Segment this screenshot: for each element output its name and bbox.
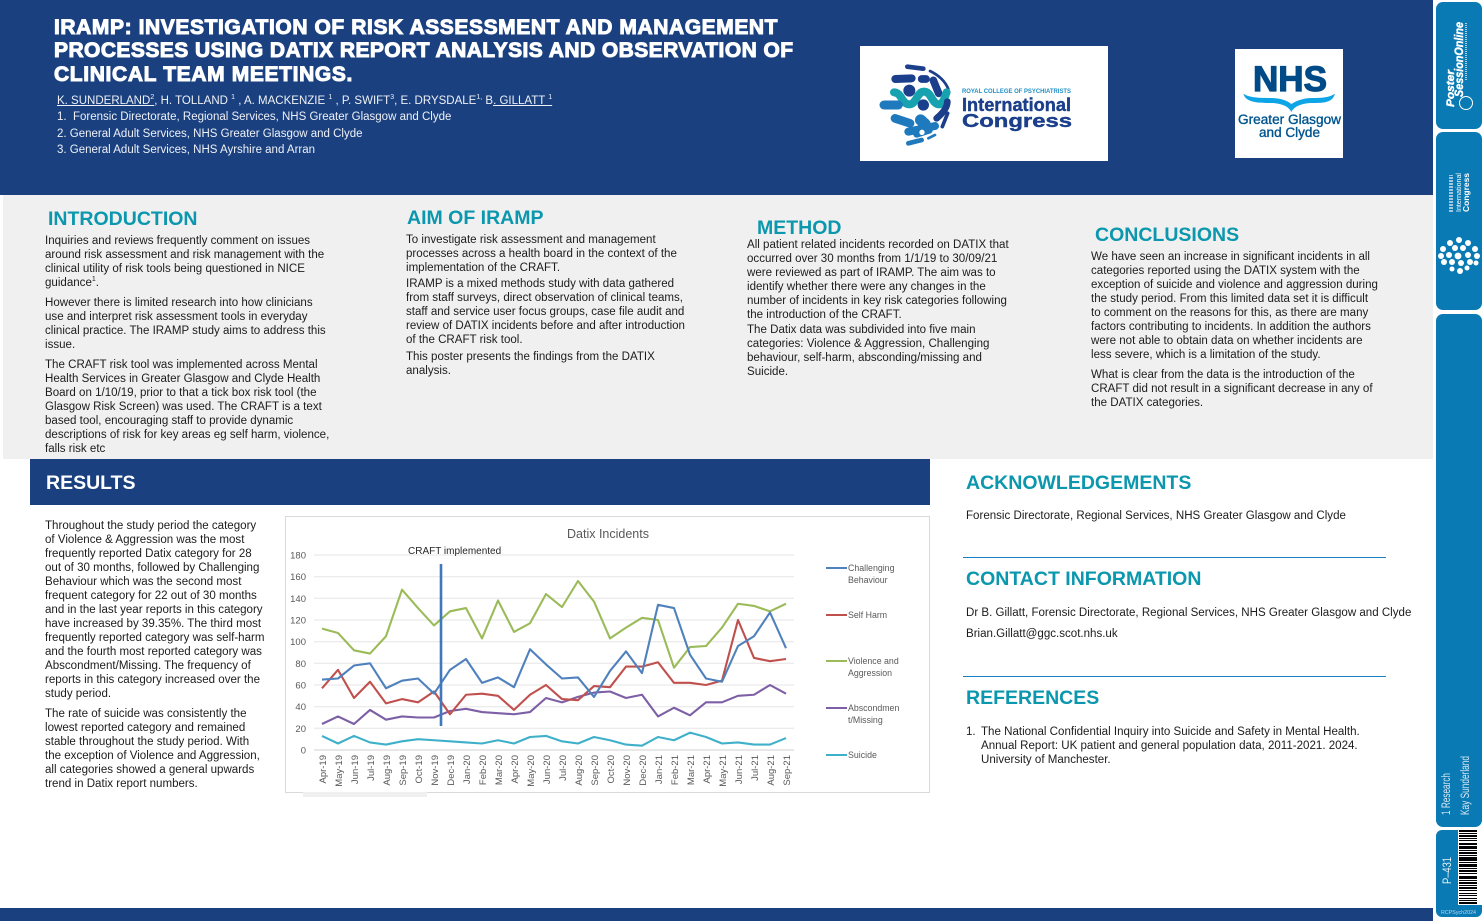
logo: Royal College of Psychiatrists International Congress: ROYAL COLLEGE OF PSYCHIATRISTS xyxy=(962,88,1072,95)
text: conclusions paragraphs: the study period. From this limited data set it is difficult xyxy=(1091,293,1368,305)
text: results paragraphs: reports in this category increased over the xyxy=(45,674,260,686)
panel: introduction xyxy=(45,208,329,455)
text: introduction paragraphs: Board on 1/10/19, prior to that a tick box risk tool (the xyxy=(45,387,316,399)
logo: NHS Greater Glasgow and Clyde xyxy=(1235,49,1343,158)
y axis labels: 60 xyxy=(295,680,306,692)
panel: acknowledgements xyxy=(966,472,1346,522)
x axis labels: Sep-21 xyxy=(782,755,793,786)
panel: contact information xyxy=(966,568,1411,640)
text: acknowledgements: Forensic Directorate, Regional Services, NHS Greater Glasgow and Clyde xyxy=(966,510,1346,522)
text: conclusions paragraphs: factors contributing to incidents. In addition the authors xyxy=(1091,321,1371,333)
grey content panel xyxy=(3,195,1433,459)
text: introduction paragraphs: Health Services in Greater Glasgow and Clyde Health xyxy=(45,373,320,385)
heading: aim: AIM OF IRAMP xyxy=(407,207,544,229)
authors: K. SUNDERLAND2, H. TOLLAND 1 , A. MACKENZIE 1 , P. SWIFT3, E. DRYSDALE1, B. GILLATT 1 xyxy=(57,94,552,107)
y axis labels: 100 xyxy=(290,637,306,648)
text: introduction paragraphs: use and interpret risk assessment tools in everyday xyxy=(45,311,308,323)
text: method paragraphs: behaviour, self-harm, absconding/missing and xyxy=(747,352,982,364)
y axis labels: 40 xyxy=(295,702,306,713)
text: aim paragraphs: To investigate risk assessment and management xyxy=(406,234,656,246)
y axis labels: 0 xyxy=(301,746,306,756)
x axis labels: Apr-20 xyxy=(510,755,521,784)
text: conclusions paragraphs: We have seen an increase in significant incidents in all xyxy=(1091,251,1370,263)
text: introduction paragraphs: issue. The CRAFT risk tool was implemented across Mental xyxy=(45,339,318,371)
text: introduction paragraphs: based tool, encouraging staff to provide dynamic xyxy=(45,415,293,427)
x axis labels: Oct-20 xyxy=(606,755,617,784)
tab: presenter xyxy=(1436,314,1482,827)
y axis labels: 20 xyxy=(295,724,306,735)
text: aim paragraphs: analysis. xyxy=(406,365,451,377)
text: introduction paragraphs: guidance1. However there is limited research into how clinicians xyxy=(45,276,313,309)
heading: results: RESULTS xyxy=(46,472,136,494)
text: conclusions paragraphs xyxy=(1091,251,1378,409)
logo: Royal College of Psychiatrists International Congress: Congress xyxy=(962,111,1072,131)
text: method paragraphs: number of incidents in key risk categories following xyxy=(747,295,1007,307)
y axis labels: 160 xyxy=(290,572,306,583)
legend xyxy=(826,563,899,760)
text: introduction paragraphs: falls risk etc xyxy=(45,443,105,455)
text: method paragraphs xyxy=(747,239,1009,378)
results heading bar xyxy=(30,459,930,505)
data lines xyxy=(322,581,786,746)
text: results paragraphs: out of 30 months, followed by Challenging xyxy=(45,562,259,574)
logo: Royal College of Psychiatrists International Congress xyxy=(860,46,1108,161)
text: introduction paragraphs: around risk assessment and risk management with the xyxy=(45,249,324,261)
x axis labels: Aug-20 xyxy=(574,755,585,786)
text: aim paragraphs: from staff surveys, direct observation of clinical teams, xyxy=(406,292,683,304)
text: results paragraphs: have increased by 39.35%. The third most xyxy=(45,618,261,630)
text: results paragraphs: frequently reported Datix category for 28 xyxy=(45,548,252,560)
panel: conclusions xyxy=(1091,224,1378,409)
heading: contact: CONTACT INFORMATION xyxy=(966,568,1201,590)
text: introduction paragraphs xyxy=(45,235,329,455)
text: aim paragraphs: processes across a health board in the context of the xyxy=(406,248,677,260)
text: results paragraphs: frequently reported category was self-harm xyxy=(45,632,264,644)
tab: poster number and barcode xyxy=(1436,830,1482,917)
y axis labels: 120 xyxy=(290,616,306,626)
panel: references xyxy=(966,687,1360,766)
line: abscondment xyxy=(322,685,786,724)
title: PROCESSES USING DATIX REPORT ANALYSIS AND OBSERVATION OF xyxy=(54,39,794,62)
panel: references: The National Confidential Inquiry into Suicide and Safety in Mental Health. xyxy=(981,726,1360,738)
legend: Violence and xyxy=(848,656,899,666)
x axis labels: Feb-21 xyxy=(670,755,681,785)
text: introduction paragraphs: Glasgow Risk Screen) was used. The CRAFT is a text xyxy=(45,401,322,413)
panel: aim of IRAMP xyxy=(406,207,685,377)
title xyxy=(54,16,794,86)
x axis labels: Sep-19 xyxy=(398,755,409,786)
text: results paragraphs xyxy=(45,520,264,790)
line: suicide xyxy=(322,733,786,746)
x axis labels: Nov-19 xyxy=(430,755,441,786)
x axis labels xyxy=(318,755,793,787)
legend: Self Harm xyxy=(848,610,887,620)
footer band xyxy=(0,908,1433,921)
heading: method: METHOD xyxy=(757,217,842,239)
x axis labels: Apr-21 xyxy=(702,755,713,784)
text: conclusions paragraphs: were not able to obtain data on whether incidents are xyxy=(1091,335,1363,347)
chart title: Datix Incidents xyxy=(567,527,649,541)
text: method paragraphs: the introduction of the CRAFT. The Datix data was subdivided into five main xyxy=(747,309,976,336)
tab: International Congress: Congress xyxy=(1462,172,1471,212)
heading: conclusions: CONCLUSIONS xyxy=(1095,224,1239,246)
text: conclusions paragraphs: less severe, which is a limitation of the study. What is clear from the data is the introduction of the xyxy=(1091,349,1355,381)
text: aim paragraphs: review of DATIX incidents before and after introduction xyxy=(406,320,685,332)
logo: NHS Greater Glasgow and Clyde: NHS xyxy=(1253,60,1327,99)
x axis labels: Nov-20 xyxy=(622,755,633,786)
text: method paragraphs: Suicide. xyxy=(747,366,788,378)
logo: Royal College of Psychiatrists International Congress: International xyxy=(962,95,1071,115)
x axis labels: Dec-19 xyxy=(446,755,457,786)
x axis labels: Mar-20 xyxy=(494,755,505,785)
text: results paragraphs: Behaviour which was the second most xyxy=(45,576,241,588)
text: results paragraphs: of Violence & Aggression was the most xyxy=(45,534,244,546)
text: conclusions paragraphs: categories reported using the DATIX system with the xyxy=(1091,265,1360,277)
logo: NHS Greater Glasgow and Clyde: and Clyde xyxy=(1259,125,1320,140)
y axis labels: 140 xyxy=(290,594,306,605)
text: results paragraphs: Throughout the study period the category xyxy=(45,520,256,532)
x axis labels: Apr-19 xyxy=(318,755,329,784)
panel: method xyxy=(747,217,1009,378)
legend: Challenging xyxy=(848,563,895,573)
x axis labels: May-21 xyxy=(718,755,729,787)
line: self harm xyxy=(322,620,786,714)
x axis labels: May-20 xyxy=(526,755,537,787)
text: aim paragraphs xyxy=(406,234,685,377)
y axis labels: 80 xyxy=(295,659,306,670)
text: aim paragraphs: of the CRAFT risk tool. This poster presents the findings from the DATIX xyxy=(406,334,655,363)
text: conclusions paragraphs: CRAFT did not result in a significant decrease in any of xyxy=(1091,383,1373,395)
text: results paragraphs: Abscondment/Missing. The frequency of xyxy=(45,660,251,672)
text: results paragraphs: the exception of Violence and Aggression, xyxy=(45,750,260,762)
x axis labels: Aug-21 xyxy=(766,755,777,786)
text: aim paragraphs: staff and service user focus groups, case file audit and xyxy=(406,306,684,318)
affiliations: 1. Forensic Directorate, Regional Services, NHS Greater Glasgow and Clyde xyxy=(57,111,451,123)
tab: presenter: 1 Research xyxy=(1441,773,1453,815)
tab: poster number and barcode: RCPSych2024 xyxy=(1441,910,1476,916)
y axis labels xyxy=(290,550,306,756)
x axis labels: Jul-19 xyxy=(366,755,377,781)
panel: contact information: Brian.Gillatt@ggc.scot.nhs.uk xyxy=(966,628,1118,640)
panel: references: University of Manchester. xyxy=(981,754,1111,766)
text: results paragraphs: lowest reported category and remained xyxy=(45,722,245,734)
y axis labels: 180 xyxy=(290,550,306,562)
affiliations: 2. General Adult Services, NHS Greater Glasgow and Clyde xyxy=(57,128,363,140)
text: results paragraphs: trend in Datix report numbers. xyxy=(45,778,198,790)
text: introduction paragraphs: clinical practice. The IRAMP study aims to address this xyxy=(45,325,326,337)
text: conclusions paragraphs: exception of suicide and violence and aggression during xyxy=(1091,279,1378,291)
x axis labels: Oct-19 xyxy=(414,755,425,784)
x axis labels: Jan-21 xyxy=(654,755,665,784)
text: contact details: Dr B. Gillatt, Forensic Directorate, Regional Services, NHS Greater Glasgow and Clyde xyxy=(966,607,1411,619)
text: method paragraphs: occurred over 30 months from 1/1/19 to 30/09/21 xyxy=(747,253,997,265)
text: results paragraphs: and in the last year reports in this category xyxy=(45,604,263,616)
legend: Abscondmen xyxy=(848,703,899,713)
text: conclusions paragraphs: the DATIX categories. xyxy=(1091,397,1203,409)
x axis labels: Jan-20 xyxy=(462,755,473,784)
text: results paragraphs: stable throughout the study period. With xyxy=(45,736,249,748)
x axis labels: Mar-21 xyxy=(686,755,697,785)
line: violence and aggression xyxy=(322,581,786,668)
text: method paragraphs: were reviewed as part of IRAMP. The aim was to xyxy=(747,267,996,279)
text: results paragraphs: all categories showed a general upwards xyxy=(45,764,254,776)
text: introduction paragraphs: descriptions of risk for key areas eg self harm, violence, xyxy=(45,429,329,441)
x axis labels: May-19 xyxy=(334,755,345,787)
tab: presenter: Kay Sunderland xyxy=(1460,756,1472,815)
text: method paragraphs: All patient related incidents recorded on DATIX that xyxy=(747,239,1009,251)
text: introduction paragraphs: clinical utility of risk tools being questioned in NICE xyxy=(45,263,305,275)
x axis labels: Sep-20 xyxy=(590,755,601,786)
heading: acknowledgements: ACKNOWLEDGEMENTS xyxy=(966,472,1191,494)
title: CLINICAL TEAM MEETINGS. xyxy=(54,63,353,86)
legend: Behaviour xyxy=(848,575,888,585)
x axis labels: Jul-21 xyxy=(750,755,761,781)
x axis labels: Jul-20 xyxy=(558,755,569,781)
x axis labels: Jun-20 xyxy=(542,755,553,784)
tab: Poster Session Online: SessionOnline xyxy=(1452,22,1466,97)
tab: Poster Session Online xyxy=(1436,2,1482,129)
legend: Aggression xyxy=(848,668,892,678)
text: method paragraphs: identify whether there were any changes in the xyxy=(747,281,986,293)
heading: introduction: INTRODUCTION xyxy=(48,208,198,230)
marker: CRAFT implemented: CRAFT implemented xyxy=(408,546,501,557)
panel: references: Annual Report: UK patient and general population data, 2011-2021. 2024. xyxy=(981,740,1358,752)
tab: poster number and barcode: P–431 xyxy=(1440,857,1454,884)
x axis labels: Jun-19 xyxy=(350,755,361,784)
affiliations: 3. General Adult Services, NHS Ayrshire and Arran xyxy=(57,144,315,156)
side tabs xyxy=(1436,2,1482,917)
text: method paragraphs: categories: Violence & Aggression, Challenging xyxy=(747,338,989,350)
tab: International Congress: International xyxy=(1454,173,1463,212)
tab: Poster Session Online: Poster xyxy=(1445,69,1457,107)
tab: International Congress xyxy=(1436,132,1482,310)
text: results paragraphs: frequent category for 22 out of 30 months xyxy=(45,590,257,602)
chart: Datix incidents line chart xyxy=(285,516,930,797)
legend: t/Missing xyxy=(848,715,883,725)
logo: NHS Greater Glasgow and Clyde: Greater Glasgow xyxy=(1238,112,1341,127)
header band xyxy=(0,0,1433,195)
line: challenging behaviour xyxy=(322,605,786,697)
affiliations xyxy=(57,111,451,156)
text: reference list: 1. xyxy=(966,726,976,738)
text: conclusions paragraphs: to comment on the reasons for this, as there are many xyxy=(1091,307,1368,319)
text: results paragraphs: study period. The rate of suicide was consistently the xyxy=(45,688,247,720)
heading: references: REFERENCES xyxy=(966,687,1099,709)
x axis labels: Aug-19 xyxy=(382,755,393,786)
x axis labels: Feb-20 xyxy=(478,755,489,785)
text: results paragraphs: and the fourth most reported category was xyxy=(45,646,262,658)
text: aim paragraphs: implementation of the CRAFT. IRAMP is a mixed methods study with data gathered xyxy=(406,262,674,290)
x axis labels: Dec-20 xyxy=(638,755,649,786)
legend: Suicide xyxy=(848,750,877,760)
x axis labels: Jun-21 xyxy=(734,755,745,784)
text: introduction paragraphs: Inquiries and reviews frequently comment on issues xyxy=(45,235,310,247)
title: IRAMP: INVESTIGATION OF RISK ASSESSMENT AND MANAGEMENT xyxy=(54,16,778,39)
